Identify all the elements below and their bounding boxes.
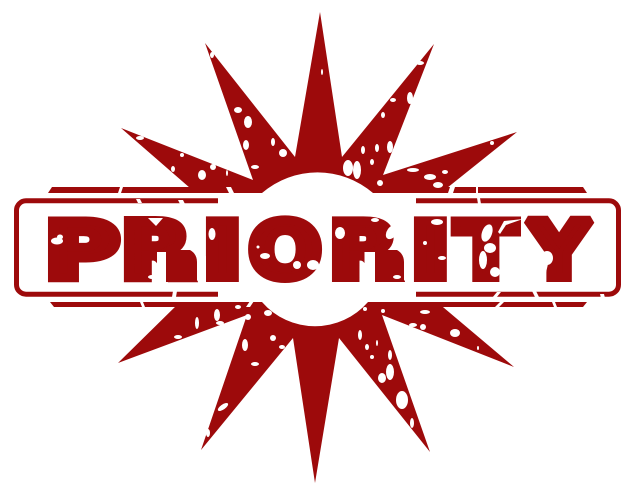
title: PRIORITY: O bbox=[249, 206, 321, 297]
title: PRIORITY bbox=[44, 205, 591, 297]
title: PRIORITY: P bbox=[44, 206, 119, 296]
rounded frame bbox=[16, 201, 618, 294]
title: PRIORITY: I bbox=[202, 206, 243, 296]
distressed texture bbox=[51, 52, 605, 437]
starburst lower rays bbox=[118, 302, 514, 483]
title: PRIORITY: T bbox=[455, 205, 516, 296]
title: PRIORITY: Y bbox=[528, 206, 591, 297]
title: PRIORITY: I bbox=[410, 206, 451, 296]
title: PRIORITY: R bbox=[329, 205, 399, 296]
outer stripes bbox=[48, 187, 587, 307]
starburst upper rays bbox=[121, 12, 517, 193]
title: PRIORITY: R bbox=[121, 206, 192, 297]
